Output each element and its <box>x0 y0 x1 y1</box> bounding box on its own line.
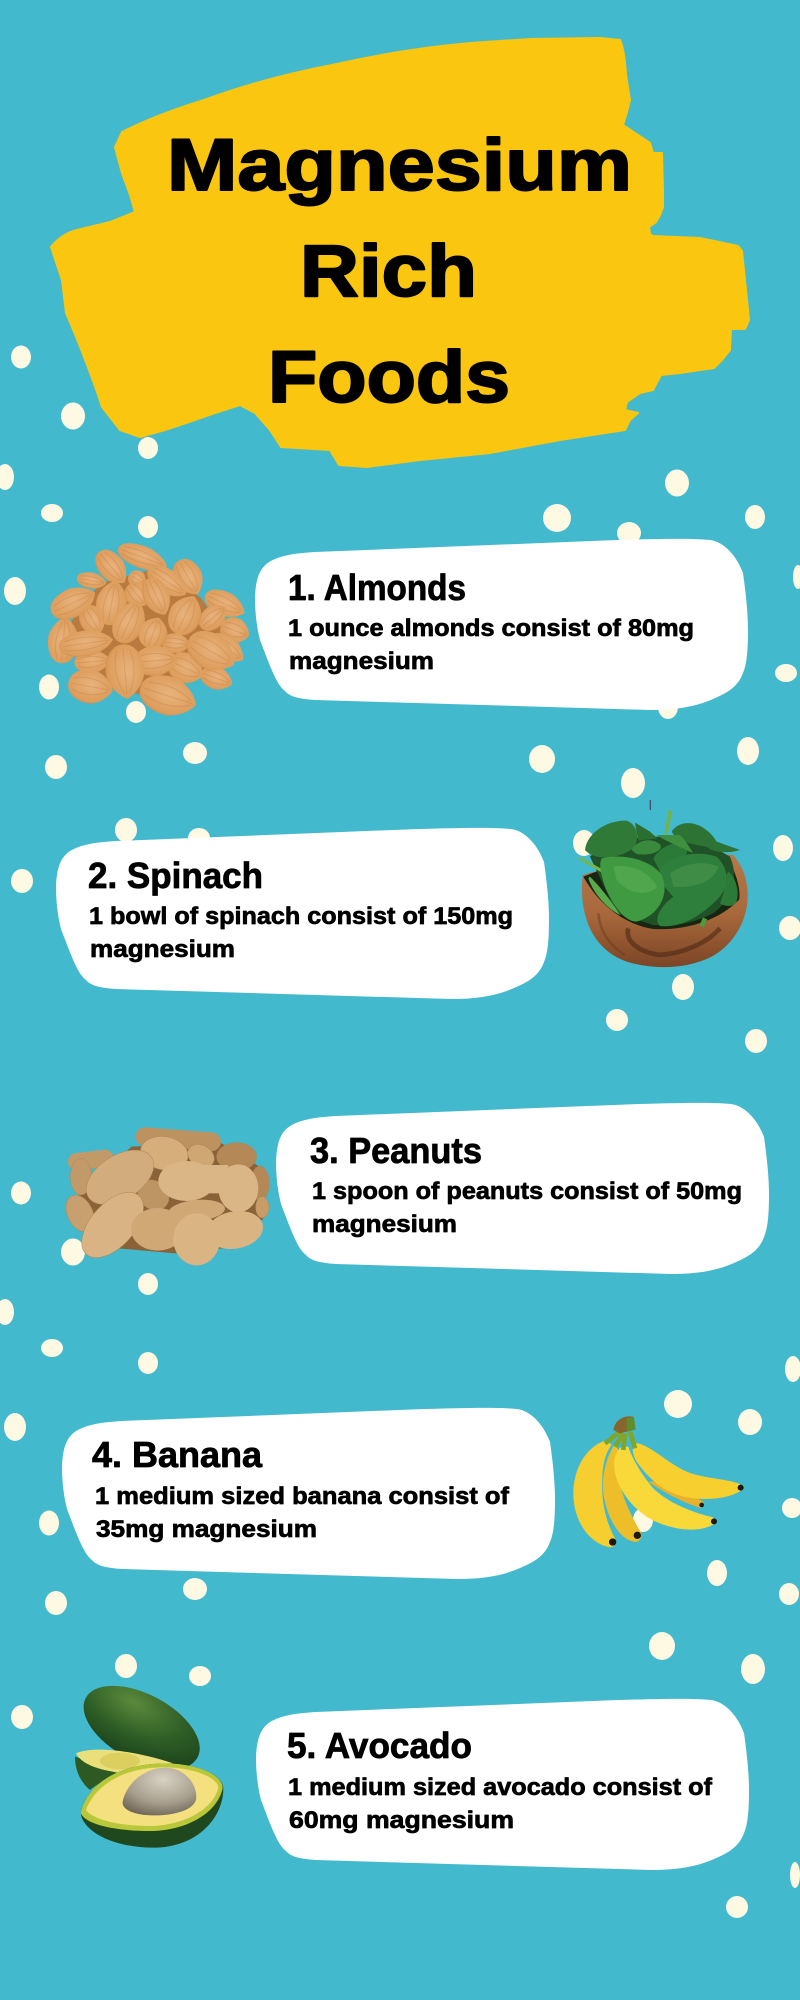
title text: Rich <box>300 231 477 312</box>
back half <box>75 1757 123 1790</box>
description <box>288 1774 713 1834</box>
description <box>312 1178 742 1238</box>
spinach leaves <box>580 810 740 927</box>
panel: almonds <box>255 539 748 710</box>
icon: avocado <box>70 1669 223 1848</box>
description <box>95 1483 510 1543</box>
card background <box>62 1408 555 1579</box>
description: 35mg magnesium <box>96 1516 317 1543</box>
heading: 3. Peanuts <box>310 1130 482 1171</box>
description <box>89 903 513 963</box>
description: 1 bowl of spinach consist of 150mg <box>89 903 513 930</box>
heading: 5. Avocado <box>287 1725 472 1766</box>
description: 60mg magnesium <box>289 1807 514 1834</box>
heading: 2. Spinach <box>88 855 263 896</box>
heading: 4. Banana <box>92 1434 263 1475</box>
title banner <box>51 38 749 467</box>
description: 1 medium sized banana consist of <box>95 1483 510 1510</box>
yellow brush blob <box>51 38 749 467</box>
card background <box>56 828 549 999</box>
panel: avocado <box>256 1699 749 1870</box>
front half <box>81 1764 223 1848</box>
card background <box>255 539 748 710</box>
icon: almonds <box>45 538 253 723</box>
panel: peanuts <box>276 1103 769 1274</box>
description: magnesium <box>289 648 434 675</box>
whole avocado <box>70 1669 213 1787</box>
icon: bananas <box>573 1416 744 1547</box>
card background <box>276 1103 769 1274</box>
panel: banana <box>62 1408 555 1579</box>
title text: Foods <box>268 337 510 418</box>
description: magnesium <box>90 936 235 963</box>
background dots <box>0 346 800 1918</box>
icon: spinach bowl <box>580 800 748 967</box>
seed <box>123 1768 196 1815</box>
panel: spinach <box>56 828 549 999</box>
description: magnesium <box>312 1211 457 1238</box>
card background <box>256 1699 749 1870</box>
icon: peanuts <box>60 1133 269 1269</box>
description: 1 ounce almonds consist of 80mg <box>288 615 694 642</box>
description: 1 medium sized avocado consist of <box>288 1774 713 1801</box>
wooden bowl <box>582 850 748 967</box>
heading: 1. Almonds <box>288 567 466 608</box>
description <box>288 615 694 675</box>
title text <box>167 125 632 418</box>
title text: Magnesium <box>167 125 632 206</box>
description: 1 spoon of peanuts consist of 50mg <box>312 1178 742 1205</box>
